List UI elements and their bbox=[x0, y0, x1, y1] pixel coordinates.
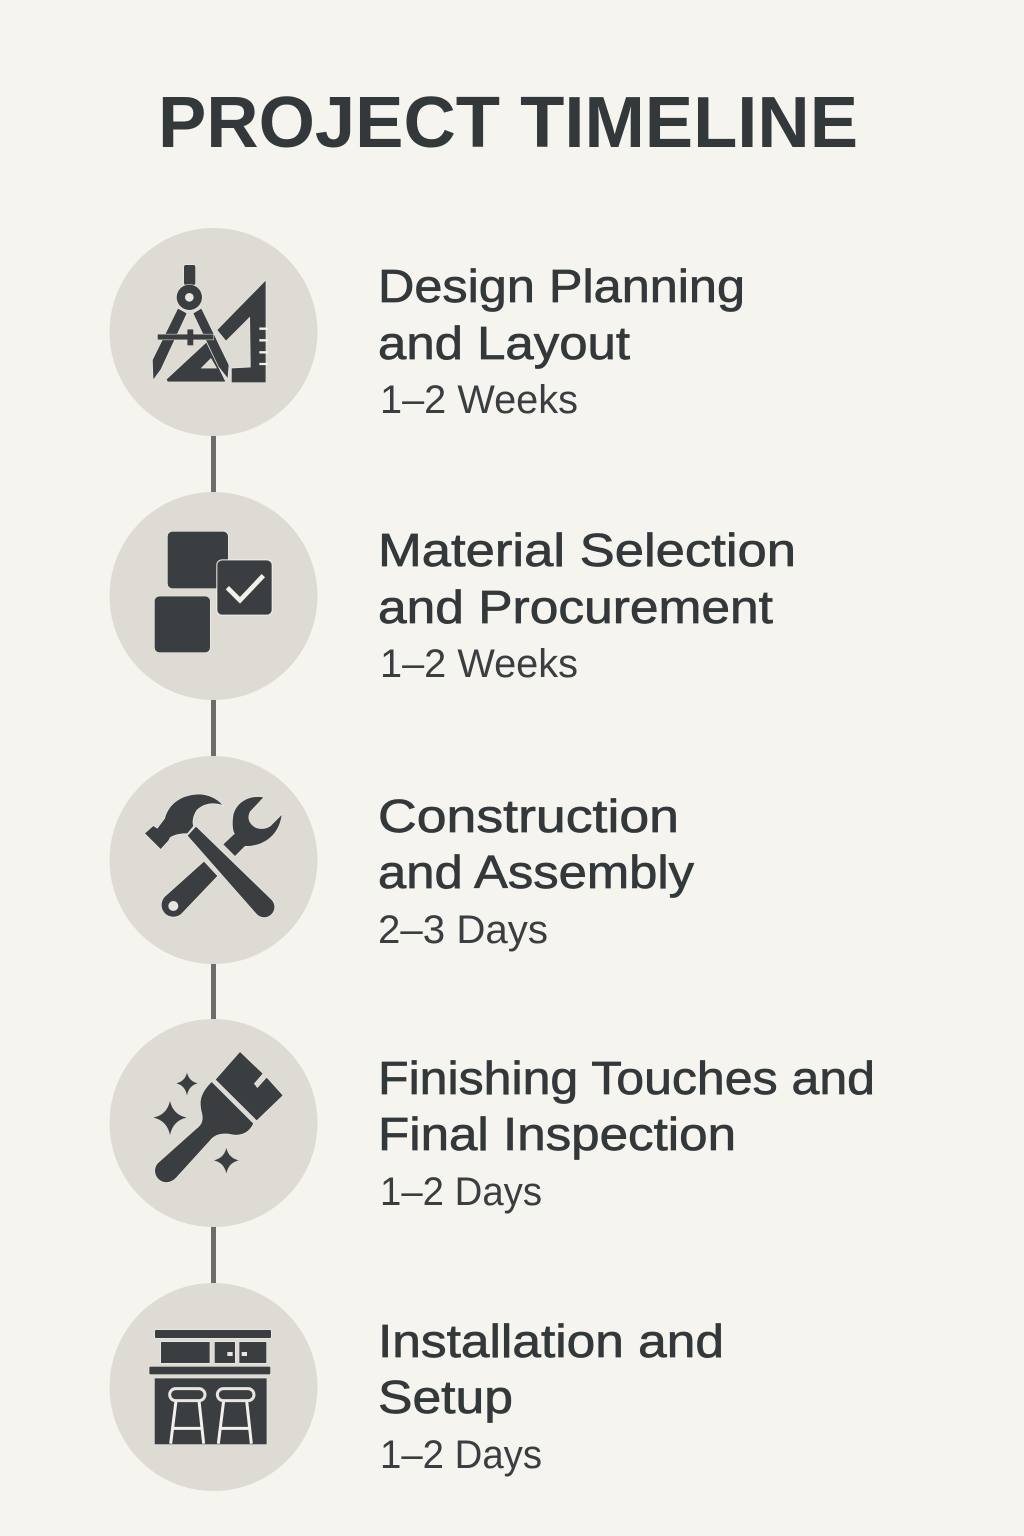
step 5 circle bbox=[110, 1283, 318, 1491]
connector line 2 bbox=[211, 699, 216, 757]
connector line 3 bbox=[211, 963, 216, 1021]
step 3 text: and Assembly bbox=[378, 846, 694, 898]
title: PROJECT TIMELINE bbox=[158, 83, 858, 163]
icon: compass and set square bbox=[153, 265, 268, 382]
icon: material swatches with check bbox=[155, 532, 272, 652]
step 1 text bbox=[378, 260, 745, 422]
step 1 circle bbox=[110, 228, 318, 436]
step 5 text: Setup bbox=[378, 1371, 513, 1423]
connector line 4 bbox=[211, 1226, 216, 1285]
step 5 text: 1–2 Days bbox=[380, 1433, 542, 1477]
step 3 text: Construction bbox=[378, 790, 679, 842]
step 4 text: 1–2 Days bbox=[380, 1170, 542, 1214]
icon: hammer and wrench bbox=[145, 794, 282, 917]
step 5 text bbox=[378, 1315, 724, 1477]
step 1 text: and Layout bbox=[378, 317, 630, 369]
step 3 circle bbox=[110, 756, 318, 964]
step 2 text: and Procurement bbox=[378, 581, 773, 633]
step 2 text: 1–2 Weeks bbox=[380, 642, 578, 686]
step 1 text: 1–2 Weeks bbox=[380, 378, 578, 422]
step 3 text bbox=[378, 790, 694, 952]
icon: cabinets and bar stools bbox=[149, 1330, 271, 1444]
icon: paint brush and sparkles bbox=[153, 1052, 283, 1182]
step 4 text: Final Inspection bbox=[378, 1108, 736, 1160]
step 2 text: Material Selection bbox=[378, 524, 796, 576]
step 5 text: Installation and bbox=[378, 1315, 724, 1367]
step 4 circle bbox=[110, 1019, 318, 1227]
step 3 text: 2–3 Days bbox=[378, 908, 548, 952]
step 4 text: Finishing Touches and bbox=[378, 1052, 875, 1104]
step 2 text bbox=[378, 524, 796, 686]
step 1 text: Design Planning bbox=[378, 260, 745, 312]
step 4 text bbox=[378, 1052, 875, 1214]
connector line 1 bbox=[211, 435, 216, 493]
step 2 circle bbox=[110, 492, 318, 700]
